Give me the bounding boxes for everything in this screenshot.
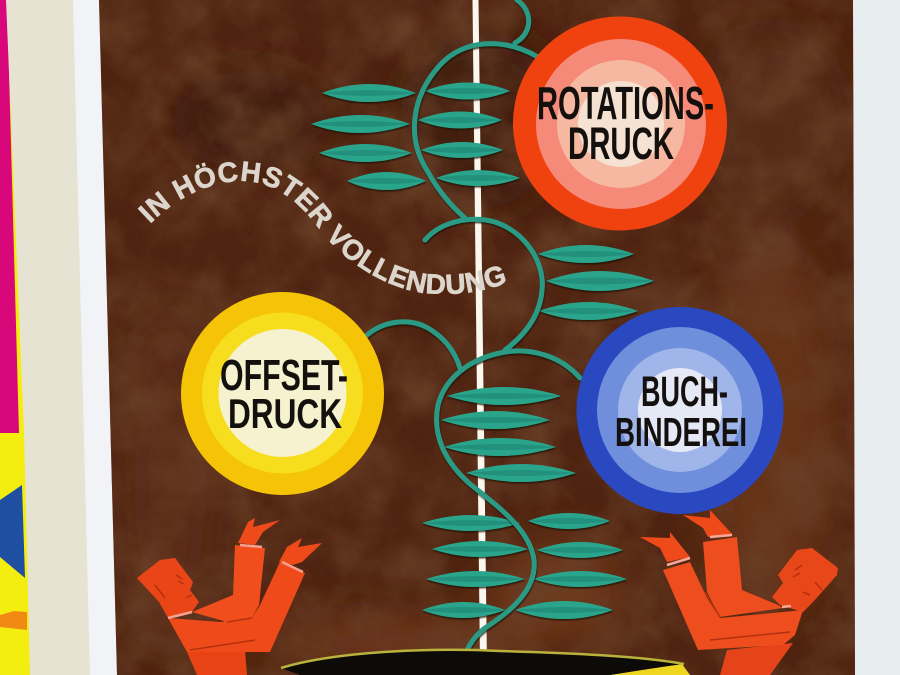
vine stems [367, 0, 580, 665]
circle: Rotationsdruck [513, 16, 727, 230]
label: Rotationsdruck [537, 77, 714, 169]
leaf row: upper left [311, 82, 520, 190]
label: Offsetdruck [220, 351, 348, 437]
label: Buchbinderei: BUCH- [641, 368, 728, 416]
label: Buchbinderei [615, 368, 747, 455]
leaves [311, 82, 654, 619]
neighbouring colourful poster at left edge [0, 0, 30, 675]
left man face details [155, 575, 255, 650]
right wall background [850, 0, 900, 675]
label: Offsetdruck: DRUCK [228, 390, 342, 437]
leaf row: centre [441, 387, 576, 482]
white vertical line [472, 0, 487, 665]
label: Rotationsdruck: ROTATIONS- [537, 77, 714, 129]
label: Buchbinderei: BINDEREI [615, 409, 747, 455]
circle: Offsetdruck [181, 292, 384, 495]
figure: right man [640, 510, 838, 675]
cream mount strip [6, 0, 90, 675]
curved slogan: IN HÖCHSTER VOLLENDUNG [138, 161, 506, 294]
white poster margin [73, 0, 117, 675]
leaf row: bottom [422, 513, 627, 619]
label: Rotationsdruck: DRUCK [568, 118, 674, 169]
circle: Buchbinderei [576, 307, 784, 514]
leaf row: middle right [538, 245, 654, 320]
label: Offsetdruck: OFFSET- [220, 351, 348, 400]
figure: left man [137, 518, 322, 675]
cauldron [281, 650, 690, 675]
right man face details [705, 565, 822, 640]
